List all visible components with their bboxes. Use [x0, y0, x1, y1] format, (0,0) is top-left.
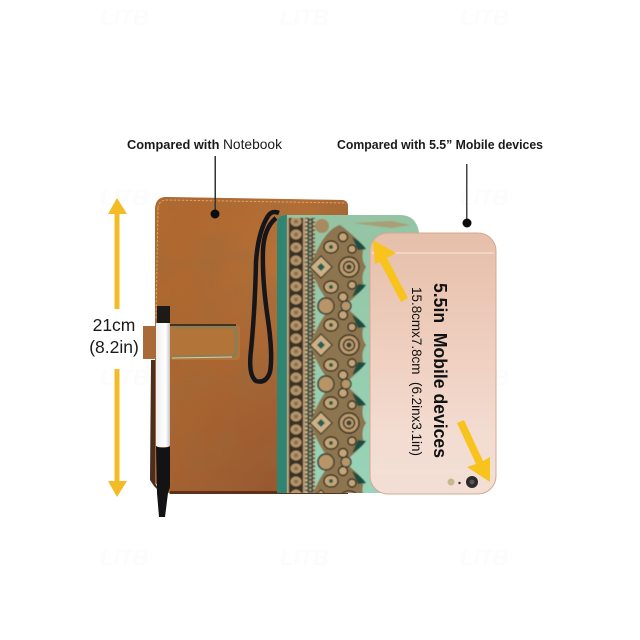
- pouch with pattern: [277, 215, 419, 493]
- watermarks: LITB: [460, 365, 509, 390]
- phone dimensions: 15.8cmx7.8cm (6.2inx3.1in): [409, 287, 424, 456]
- height label: 21cm: [93, 315, 135, 335]
- phone title: 5.5in Mobile devices: [430, 283, 450, 458]
- watermarks: [100, 5, 509, 570]
- teal band: [277, 215, 287, 493]
- wrist strap: [250, 212, 279, 382]
- height arrow: 21cm: [108, 198, 127, 497]
- watermarks: LITB: [460, 5, 509, 30]
- infographic: size comparison: [90, 139, 542, 517]
- leader: notebook: [210, 156, 220, 218]
- pen body: [156, 323, 170, 447]
- paisley motifs: [308, 218, 410, 493]
- yellow arrow: top corner: [373, 240, 408, 302]
- watermarks: LITB: [100, 5, 149, 30]
- yellow arrow: bottom corner: [457, 420, 490, 482]
- watermarks: LITB: [100, 365, 149, 390]
- watermarks: LITB: [280, 545, 329, 570]
- height label: (8.2in): [89, 337, 139, 357]
- watermarks: LITB: [100, 545, 149, 570]
- notebook: [143, 197, 349, 495]
- height label: [89, 315, 139, 357]
- woven border: [287, 218, 305, 493]
- watermarks: LITB: [460, 185, 509, 210]
- notebook clasp strap: [143, 325, 240, 360]
- pen: [156, 306, 170, 517]
- watermarks: LITB: [280, 5, 329, 30]
- pen tip: [156, 446, 170, 517]
- stripe border: [305, 218, 315, 493]
- heading: compared with mobile devices: Compared with 5.5” Mobile devices: [337, 137, 543, 152]
- flash: [448, 478, 454, 486]
- leader: phone: [462, 164, 472, 228]
- pen clip: [157, 306, 170, 323]
- phone: [370, 233, 496, 494]
- watermarks: LITB: [460, 545, 509, 570]
- heading: compared with notebook: Compared with Notebook: [127, 136, 283, 152]
- camera: [466, 476, 478, 488]
- watermarks: LITB: [100, 185, 149, 210]
